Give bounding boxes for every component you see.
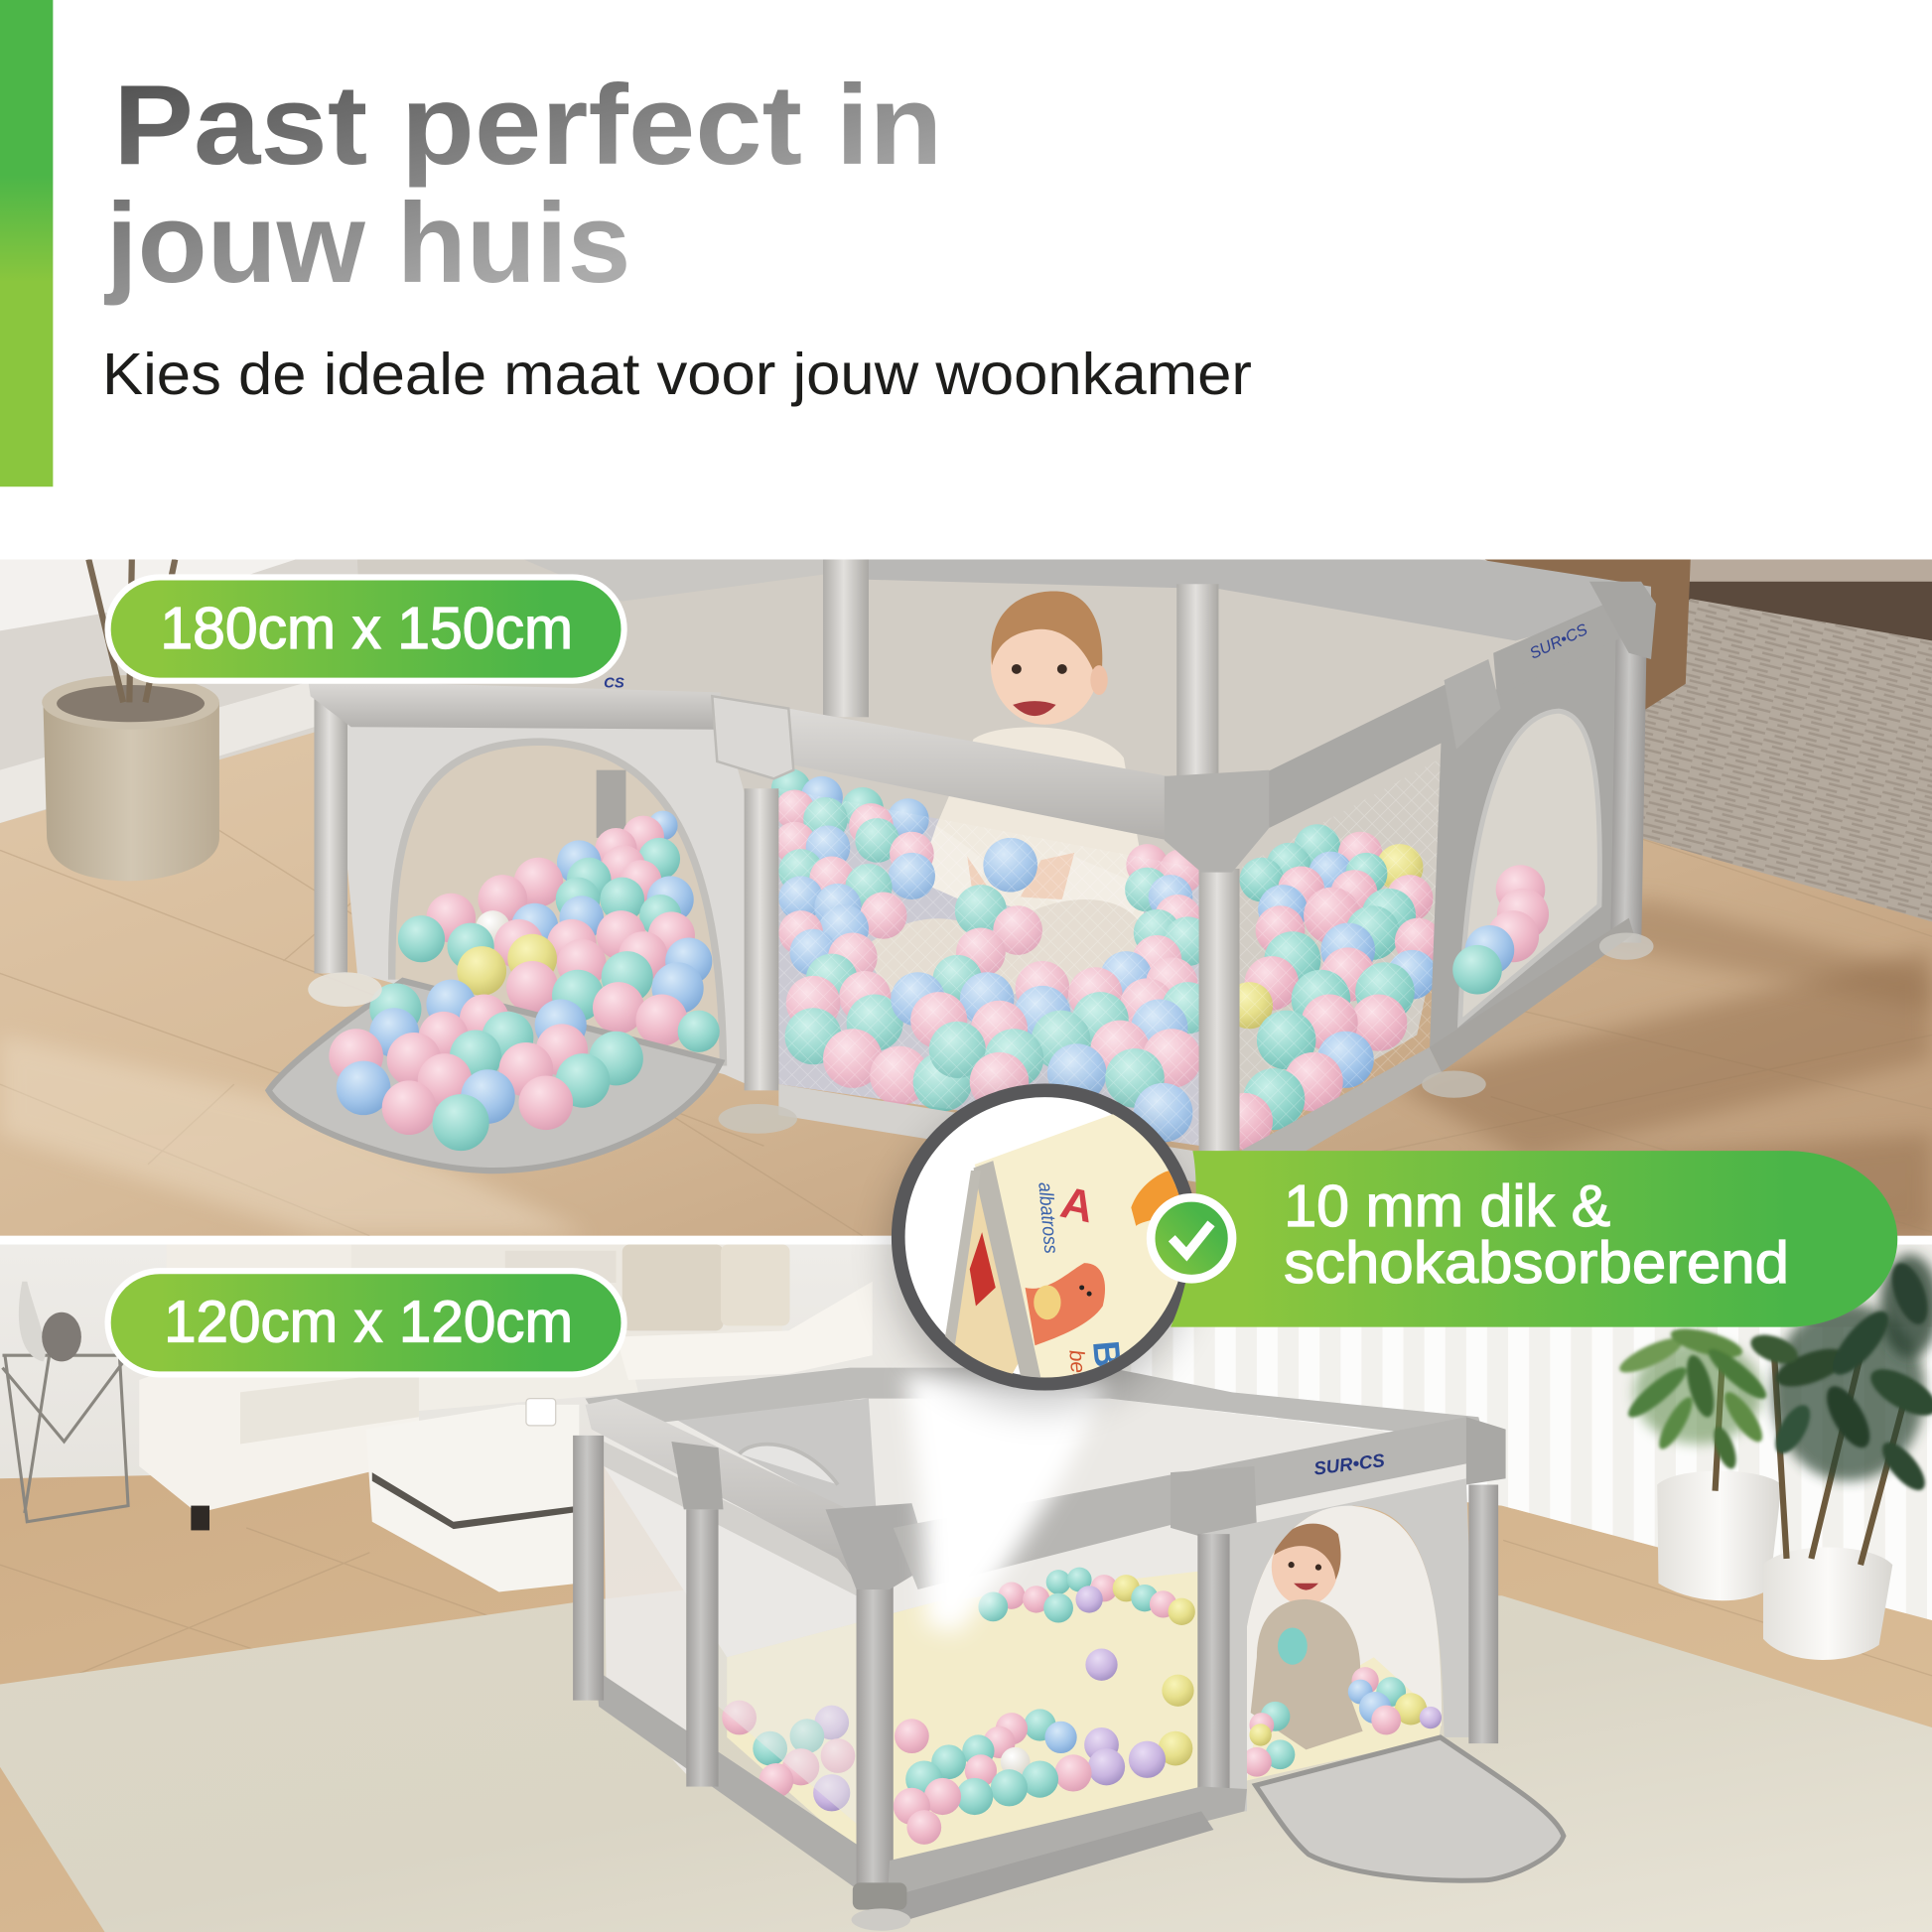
logo on pen rail: CS [604, 676, 624, 692]
back rails and posts [523, 559, 1651, 781]
size label: 180cm x 150cm: 180cm x 150cm [160, 595, 573, 661]
curtains [1109, 1327, 1932, 1620]
play mat inside pen [727, 1571, 1247, 1879]
pen frame rails and posts [573, 1368, 1506, 1931]
carpet inside pen [357, 560, 1531, 1094]
logo on pen rail: SUR•CS [1312, 1449, 1386, 1479]
right side panel with door [1241, 637, 1654, 1152]
side mesh panels [595, 1442, 869, 1897]
wood floor [0, 1466, 1932, 1932]
wood floor [0, 733, 1932, 1236]
front rail, corners and posts [308, 582, 1656, 1182]
open door flap [1256, 1737, 1564, 1880]
mat lettering: B [1085, 1339, 1129, 1369]
front mesh overlay [778, 758, 1442, 1152]
logo on pen rail [604, 621, 1590, 692]
balls inside door [398, 811, 720, 1052]
potted plants [1615, 1254, 1932, 1660]
callout: 10 mm dik en schokabsorberend [1171, 1151, 1897, 1327]
mat lettering: albatross [1034, 1181, 1061, 1255]
pen interior background [604, 1399, 1472, 1657]
callout text: 10 mm dik & [1284, 1173, 1610, 1239]
title [104, 63, 942, 307]
mat lettering: A [1056, 1178, 1098, 1232]
callout text: schokabsorberend [1284, 1229, 1789, 1296]
size label: 120cm x 120cm [108, 1271, 624, 1374]
white spotlight beam from mat callout [905, 1374, 1109, 1632]
sofa, wood table leg and patterned rug [1484, 559, 1932, 921]
door interior with baby [1242, 1506, 1442, 1780]
coffee table [366, 1399, 579, 1591]
mat lettering [1034, 1178, 1129, 1394]
mat lettering: bear [1064, 1349, 1091, 1394]
subtitle: Kies de ideale maat voor jouw woonkamer [102, 341, 1252, 407]
side table with vase [2, 1282, 128, 1522]
circle ring [898, 1090, 1191, 1384]
icon: check mark badge [1151, 1197, 1232, 1279]
photo: 180 x 150 cm playpen in living room [0, 559, 1932, 1236]
folded mat illustration [944, 1097, 1213, 1394]
callout text [1284, 1173, 1789, 1296]
front left panel with open door [347, 725, 745, 1083]
balls on mat [722, 1568, 1195, 1845]
magnifier: folded play mat [889, 1090, 1213, 1407]
baby [863, 592, 1146, 996]
door flap mat with balls [269, 980, 721, 1171]
size label: 180cm x 150cm [108, 577, 624, 681]
size label: 120cm x 120cm: 120cm x 120cm [164, 1289, 573, 1355]
green accent bar [0, 0, 53, 486]
back door panel [671, 1399, 878, 1528]
title: Past perfect in [113, 63, 942, 189]
balls base behind mesh [778, 788, 1201, 1146]
wall and window sill [0, 559, 369, 823]
plant pot with branches [42, 559, 219, 881]
title: jouw huis [104, 181, 630, 307]
callout pill [1171, 1151, 1897, 1327]
balls in pen [771, 768, 1442, 1150]
bear [1026, 1263, 1105, 1345]
circle shadow [889, 1102, 1194, 1407]
wall [0, 1245, 1932, 1479]
fox [1131, 1171, 1184, 1226]
sofa with cushions [139, 1244, 873, 1530]
carpet [0, 1589, 1932, 1932]
photo: 120 x 120 cm playpen in living room [0, 1244, 1932, 1932]
logo on pen rail: SUR•CS [1527, 621, 1590, 663]
